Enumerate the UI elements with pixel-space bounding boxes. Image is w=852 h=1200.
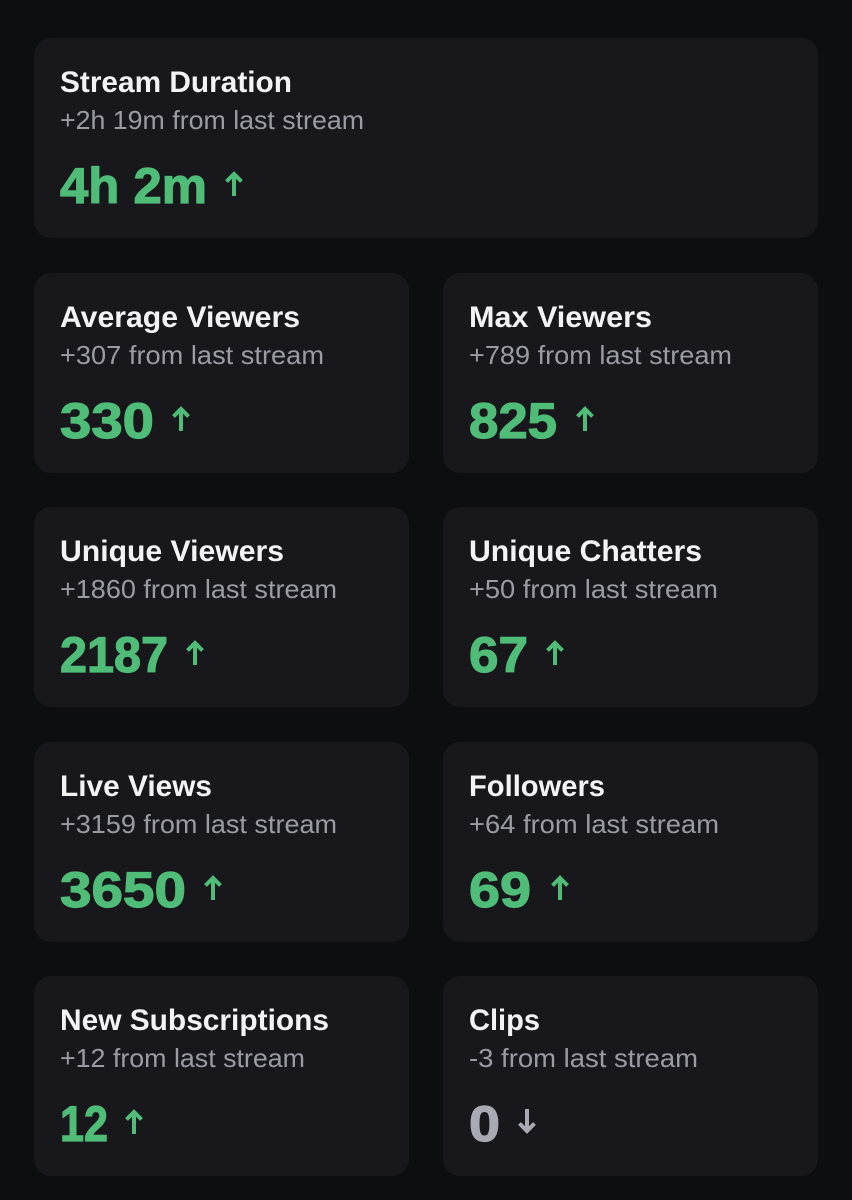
value: new subscriptions: 12	[60, 1096, 108, 1152]
icon: down arrow	[520, 1109, 534, 1131]
value: max viewers: 825	[469, 393, 557, 449]
panel: live views	[34, 742, 409, 942]
icon: up arrow	[226, 174, 242, 196]
value: stream duration: 4h 2m	[60, 158, 207, 214]
panel: unique chatters	[443, 507, 818, 707]
text: followers change: +64 from last stream	[469, 809, 719, 839]
text: unique viewers change: +1860 from last stream	[60, 574, 337, 604]
heading: unique chatters: Unique Chatters	[469, 535, 702, 568]
value: clips: 0	[469, 1096, 500, 1152]
icon: up arrow	[206, 878, 220, 900]
icon: up arrow	[188, 643, 202, 665]
text: stream duration change: +2h 19m from last stream	[60, 105, 364, 135]
heading: unique viewers: Unique Viewers	[60, 535, 284, 568]
value: live views: 3650	[60, 862, 186, 918]
panel: unique viewers	[34, 507, 409, 707]
value: unique chatters: 67	[469, 627, 528, 683]
value: unique viewers: 2187	[60, 627, 168, 683]
icon: up arrow	[126, 1112, 142, 1134]
icon: up arrow	[578, 409, 592, 431]
text: average viewers change: +307 from last stream	[60, 340, 324, 370]
text: live views change: +3159 from last stream	[60, 809, 337, 839]
panel: average viewers	[34, 273, 409, 473]
panel: max viewers	[443, 273, 818, 473]
heading: clips: Clips	[469, 1004, 540, 1037]
panel: stream duration	[34, 38, 818, 238]
panel: followers	[443, 742, 818, 942]
text: unique chatters change: +50 from last stream	[469, 574, 718, 604]
icon: up arrow	[548, 643, 562, 665]
heading: followers: Followers	[469, 770, 605, 803]
heading: new subscriptions: New Subscriptions	[60, 1004, 329, 1037]
panel: new subscriptions	[34, 976, 409, 1176]
text: clips change: -3 from last stream	[469, 1043, 698, 1073]
value: average viewers: 330	[60, 393, 154, 449]
heading: average viewers: Average Viewers	[60, 301, 300, 334]
text: new subscriptions change: +12 from last stream	[60, 1043, 305, 1073]
heading: stream duration: Stream Duration	[60, 66, 292, 99]
text: max viewers change: +789 from last stream	[469, 340, 732, 370]
value: followers: 69	[469, 862, 531, 918]
heading: max viewers: Max Viewers	[469, 301, 652, 334]
heading: live views: Live Views	[60, 770, 212, 803]
icon: up arrow	[552, 878, 568, 900]
icon: up arrow	[174, 409, 188, 431]
panel: clips	[443, 976, 818, 1176]
